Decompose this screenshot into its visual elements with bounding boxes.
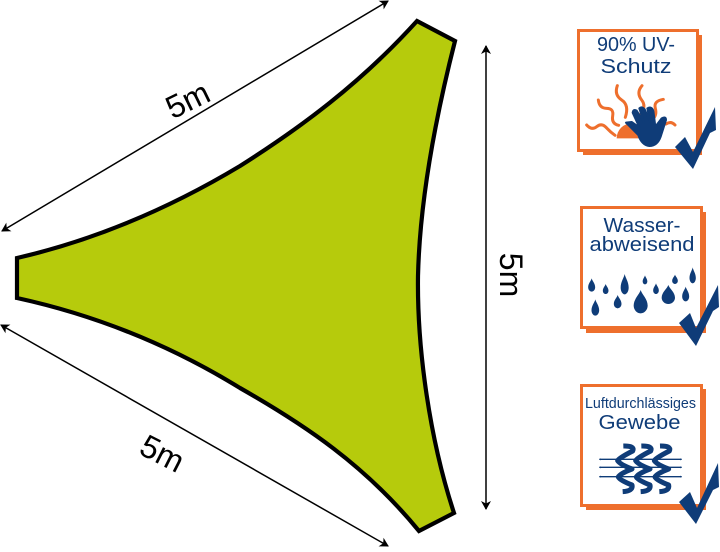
- arrow: right side dimension: [485, 46, 487, 509]
- badge: breathable fabric: [582, 386, 719, 524]
- label: top side 5m: 5m: [160, 74, 216, 126]
- badge text: Wasser-abweisend: abweisend: [590, 234, 694, 256]
- icon: check mark: [679, 285, 719, 346]
- badge text: Luftdurchlässiges Gewebe: Gewebe: [598, 412, 680, 434]
- badge text: Luftdurchlässiges Gewebe: [585, 395, 696, 434]
- label: right side 5m: 5m: [493, 253, 529, 297]
- badge: water repellent: [582, 208, 719, 346]
- badge text: 90% UV-Schutz: 90% UV-: [597, 34, 675, 56]
- badge text: Wasser-abweisend: Wasser-: [604, 215, 680, 237]
- arrow: top side dimension: [2, 1, 388, 231]
- badge text: 90% UV-Schutz: Schutz: [600, 56, 672, 78]
- badge text: Wasser-abweisend: [590, 215, 694, 256]
- label: bottom side 5m: 5m: [134, 427, 190, 480]
- arrow: bottom side dimension: [1, 325, 388, 546]
- icon: check mark: [679, 463, 719, 524]
- icon: water drops: [588, 267, 696, 316]
- icon: check mark: [675, 107, 716, 169]
- icon: sun and hand: [587, 86, 675, 146]
- badge: UV protection: [578, 30, 716, 169]
- badge text: 90% UV-Schutz: [597, 34, 675, 78]
- triangular shade sail: [17, 21, 455, 531]
- icon: woven fabric with air arrows: [599, 446, 682, 492]
- badge text: Luftdurchlässiges Gewebe: Luftdurchlässiges: [585, 395, 696, 412]
